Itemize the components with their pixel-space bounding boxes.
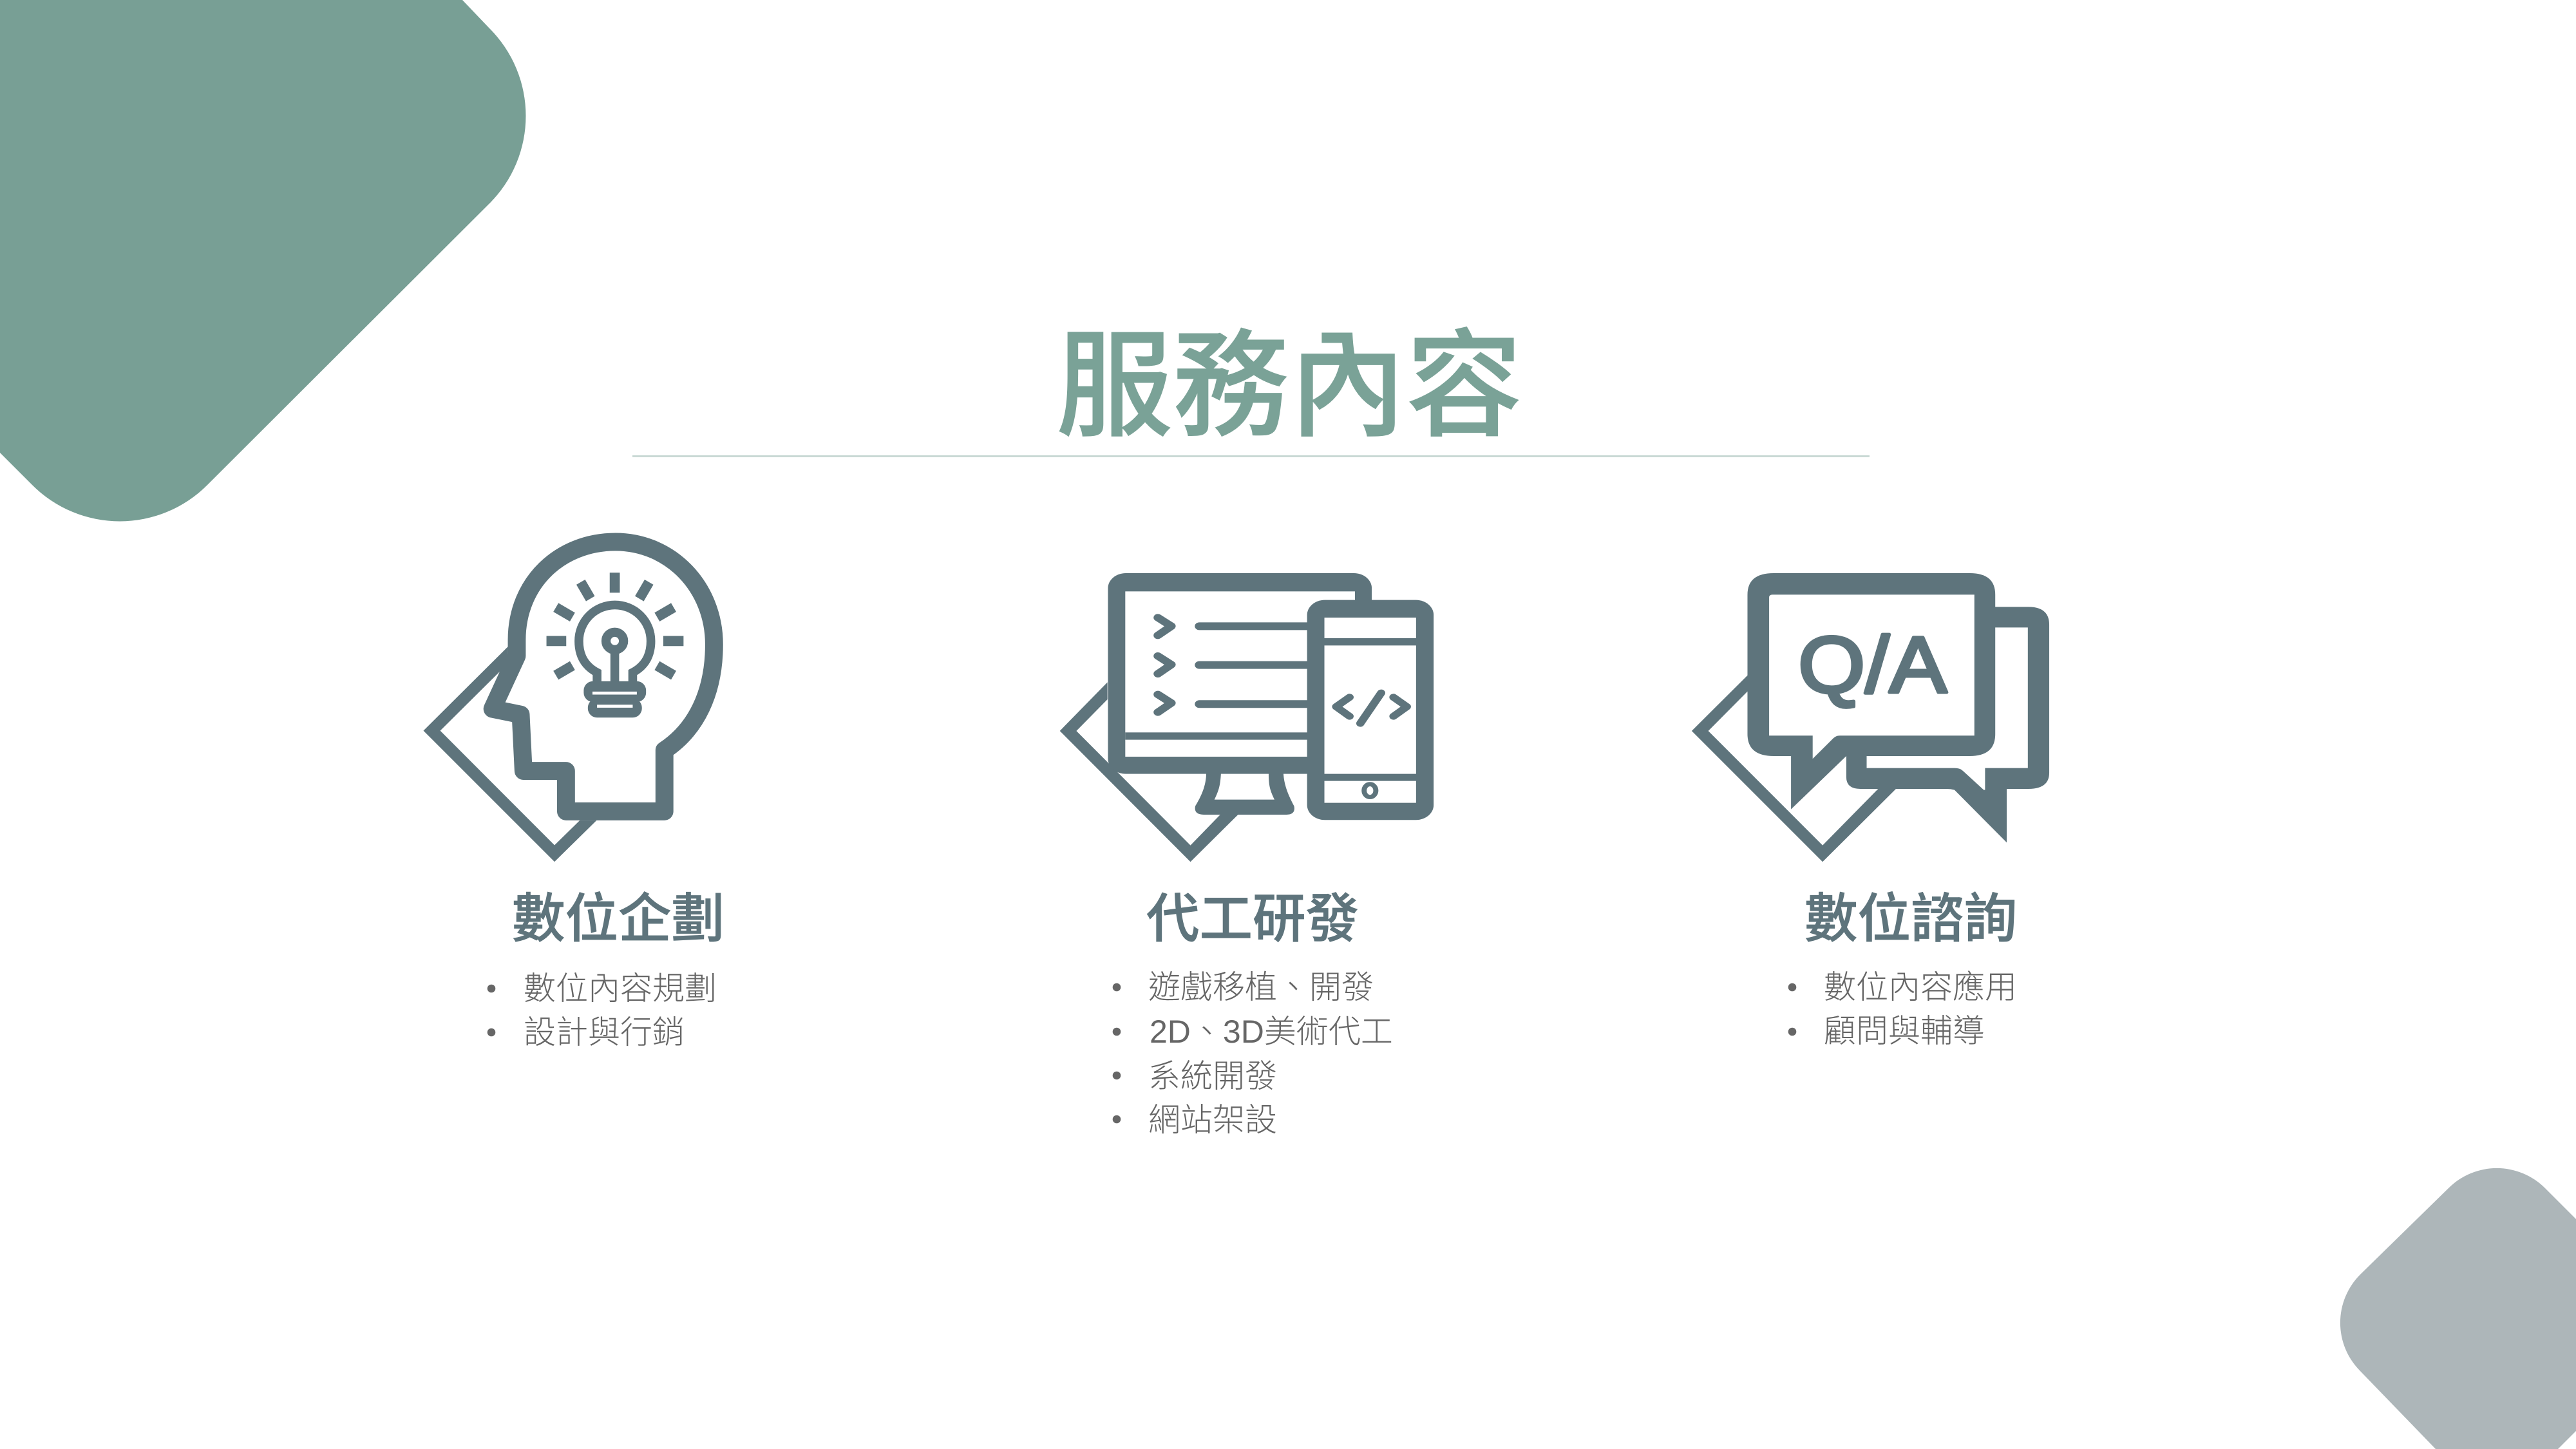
title: 服務內容 bbox=[1056, 321, 1522, 451]
heading: contract development: 代工研發 bbox=[1146, 889, 1359, 949]
panel: digital consulting bbox=[1692, 573, 2049, 1049]
panel: digital planning bbox=[423, 542, 724, 1050]
icon: Q/A speech bubbles: Q/A bbox=[1798, 621, 1947, 710]
list: digital planning items: 數位內容規劃 bbox=[524, 971, 717, 1007]
list: digital planning items bbox=[488, 971, 717, 1050]
title underline bbox=[632, 455, 1870, 457]
list: contract development items bbox=[1113, 969, 1393, 1138]
list: contract development items: 系統開發 bbox=[1148, 1058, 1277, 1094]
icon: monitor and phone bbox=[1060, 573, 1434, 862]
list: contract development items: 2D、3D美術代工 bbox=[1150, 1014, 1393, 1050]
heading: digital consulting: 數位諮詢 bbox=[1804, 889, 2017, 949]
list: contract development items: 網站架設 bbox=[1148, 1102, 1277, 1138]
list: digital consulting items bbox=[1788, 969, 2017, 1049]
list: digital planning items: 設計與行銷 bbox=[524, 1014, 685, 1050]
list: digital consulting items: 數位內容應用 bbox=[1824, 969, 2017, 1005]
heading: digital planning: 數位企劃 bbox=[512, 889, 724, 949]
icon: Q/A speech bubbles bbox=[1692, 573, 2049, 862]
list: digital consulting items: 顧問與輔導 bbox=[1824, 1013, 1985, 1049]
list: contract development items: 遊戲移植、開發 bbox=[1148, 969, 1374, 1005]
panel: contract development bbox=[1060, 573, 1434, 1138]
gray corner shape bbox=[2340, 1168, 2576, 1449]
icon: head with light bulb bbox=[423, 542, 714, 862]
teal corner shape bbox=[0, 0, 526, 521]
